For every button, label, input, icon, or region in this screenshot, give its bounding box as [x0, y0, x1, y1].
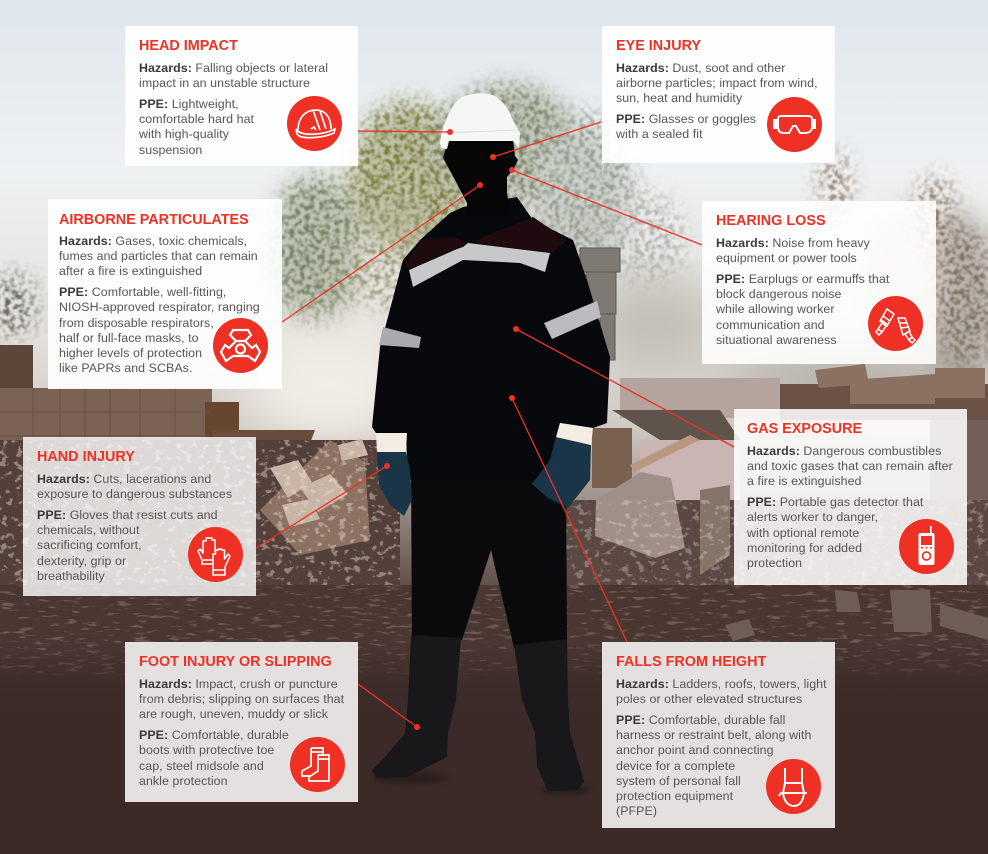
text: airborne PPE: half or full-face masks, to: [59, 331, 199, 345]
text: foot PPE: cap, steel midsole and: [139, 759, 264, 773]
text: falls hazards: [616, 676, 827, 706]
text: falls PPE: [616, 713, 811, 818]
text: eye injury hazards: sun, heat and humidity: [616, 91, 742, 105]
icon: fall harness: [766, 759, 821, 814]
text: foot PPE: boots with protective toe: [139, 743, 274, 757]
text: hearing hazards: equipment or power tools: [716, 251, 857, 265]
text: head impact PPE: suspension: [139, 143, 202, 157]
right wall and shed: [580, 248, 988, 610]
tree tone underlay: [270, 85, 988, 390]
heading: falls from height: FALLS FROM HEIGHT: [616, 654, 766, 670]
text: foot hazards: from debris; slipping on surfaces that: [139, 692, 344, 706]
text: falls PPE: (PFPE): [616, 804, 657, 818]
heading: hand injury: HAND INJURY: [37, 449, 135, 465]
text: head impact hazards: impact in an unstable structure: [139, 76, 310, 90]
text: hearing PPE: while allowing worker: [716, 302, 835, 316]
text: airborne hazards: fumes and particles that can remain: [59, 249, 258, 263]
text: eye injury hazards: airborne particles; impact from wind,: [616, 76, 818, 90]
icon: goggles: [767, 97, 822, 152]
trousers: [411, 476, 567, 648]
text: hearing PPE: communication and: [716, 318, 825, 332]
text: foot hazards: Hazards: Impact, crush or puncture: [139, 676, 338, 690]
text: falls PPE: protection equipment: [616, 789, 733, 803]
right cuff: [556, 423, 593, 445]
text: eye injury PPE: PPE: Glasses or goggles: [616, 112, 756, 126]
head silhouette: [443, 140, 518, 215]
icon: gas detector: [899, 519, 954, 574]
text: hearing PPE: situational awareness: [716, 333, 837, 347]
heading: foot injury: FOOT INJURY OR SLIPPING: [139, 654, 332, 670]
text: gas hazards: and toxic gases that can remain after: [747, 459, 953, 473]
heading: hearing loss: HEARING LOSS: [716, 213, 826, 229]
left arm stripe: [379, 327, 421, 348]
text: airborne hazards: after a fire is extinguished: [59, 264, 202, 278]
text: falls PPE: device for a complete: [616, 759, 735, 773]
leader lines: [256, 122, 734, 727]
text: gas hazards: a fire is extinguished: [747, 474, 862, 488]
text: hand hazards: Hazards: Cuts, lacerations and: [37, 472, 211, 486]
text: gas PPE: [747, 495, 924, 570]
text: hearing PPE: [716, 272, 890, 347]
text: hand hazards: exposure to dangerous substances: [37, 487, 232, 501]
text: hearing PPE: PPE: Earplugs or earmuffs that: [716, 272, 889, 286]
icon: hard hat: [287, 96, 342, 151]
ground: [0, 585, 988, 854]
text: eye injury PPE: [616, 112, 756, 141]
text: head impact hazards: Hazards: Falling objects or lateral: [139, 60, 328, 74]
icon: gloves: [188, 527, 243, 582]
text: gas PPE: PPE: Portable gas detector that: [747, 495, 923, 509]
text: hand PPE: chemicals, without: [37, 523, 140, 537]
left rubble: [0, 439, 400, 605]
smoke: [245, 275, 980, 445]
text: hand PPE: sacrificing comfort,: [37, 538, 142, 552]
text: airborne PPE: [59, 285, 260, 375]
right rubble: [560, 472, 988, 605]
panel: eye injury: [602, 26, 835, 163]
boot shadows: [372, 772, 590, 795]
heading: airborne particulates: AIRBORNE PARTICULATES: [59, 212, 249, 228]
left boot: [372, 635, 461, 778]
text: foot PPE: PPE: Comfortable, durable: [139, 728, 289, 742]
jacket: [372, 197, 610, 480]
text: foot hazards: are rough, uneven, muddy or slick: [139, 707, 328, 721]
panel: hearing loss: [702, 201, 936, 364]
icon: earplugs: [868, 296, 923, 351]
text: gas PPE: with optional remote: [747, 526, 859, 540]
text: gas PPE: monitoring for added: [747, 541, 862, 555]
panel: hand injury: [23, 437, 256, 596]
text: head impact PPE: PPE: Lightweight,: [139, 97, 239, 111]
text: falls PPE: anchor point and connecting: [616, 743, 774, 757]
text: airborne PPE: NIOSH-approved respirator, ranging: [59, 300, 260, 314]
text: falls hazards: Hazards: Ladders, roofs, towers, light: [616, 676, 827, 690]
text: eye injury hazards: [616, 60, 818, 105]
panel: falls from height: [602, 642, 835, 828]
worker figure: [372, 93, 610, 795]
text: falls PPE: PPE: Comfortable, durable fall: [616, 713, 785, 727]
text: foot hazards: [139, 676, 344, 721]
text: falls hazards: poles or other elevated structures: [616, 692, 802, 706]
left cuff: [376, 433, 407, 452]
heading: eye injury: EYE INJURY: [616, 38, 701, 54]
left glove: [377, 452, 412, 516]
panel: foot injury or slipping: [125, 642, 358, 802]
text: head impact hazards: [139, 60, 328, 90]
hard hat: [440, 93, 520, 149]
icon: respirator mask: [213, 318, 268, 373]
text: hand PPE: PPE: Gloves that resist cuts and: [37, 508, 218, 522]
panel: gas exposure: [734, 409, 967, 585]
text: airborne hazards: Hazards: Gases, toxic chemicals,: [59, 234, 247, 248]
text: airborne PPE: like PAPRs and SCBAs.: [59, 361, 192, 375]
right glove: [532, 437, 591, 508]
text: hand PPE: dexterity, grip or: [37, 554, 126, 568]
heading: head impact: HEAD IMPACT: [139, 38, 238, 54]
text: foot PPE: ankle protection: [139, 774, 228, 788]
text: hand PPE: [37, 508, 218, 583]
maroon yoke: [405, 217, 567, 268]
text: head impact PPE: with high-quality: [139, 127, 229, 141]
text: head impact PPE: [139, 97, 254, 157]
left wall: [0, 345, 315, 470]
icon: boots: [290, 737, 345, 792]
text: head impact PPE: comfortable hard hat: [139, 112, 254, 126]
chest reflective stripe: [409, 243, 550, 287]
right boot: [514, 639, 584, 791]
text: gas PPE: alerts worker to danger,: [747, 510, 878, 524]
text: hearing hazards: [716, 236, 870, 265]
text: gas hazards: [747, 444, 953, 488]
text: airborne PPE: from disposable respirators,: [59, 316, 214, 330]
text: gas PPE: protection: [747, 556, 802, 570]
right arm stripe: [544, 301, 601, 339]
text: airborne PPE: PPE: Comfortable, well-fitting,: [59, 285, 226, 299]
text: hearing PPE: block dangerous noise: [716, 287, 841, 301]
text: falls PPE: harness or restraint belt, along with: [616, 728, 811, 742]
text: falls PPE: system of personal fall: [616, 774, 741, 788]
text: hearing hazards: Hazards: Noise from heavy: [716, 236, 870, 250]
text: hand PPE: breathability: [37, 569, 105, 583]
text: eye injury hazards: Hazards: Dust, soot and other: [616, 60, 785, 74]
panel: head impact: [125, 26, 358, 166]
text: foot PPE: [139, 728, 289, 788]
trees: [0, 85, 988, 370]
text: airborne PPE: higher levels of protection: [59, 346, 202, 360]
text: airborne hazards: [59, 234, 258, 278]
text: eye injury PPE: with a sealed fit: [616, 127, 703, 141]
text: hand hazards: [37, 472, 232, 501]
text: gas hazards: Hazards: Dangerous combustibles: [747, 444, 941, 458]
panel: airborne particulates: [48, 199, 282, 389]
heading: gas exposure: GAS EXPOSURE: [747, 421, 862, 437]
